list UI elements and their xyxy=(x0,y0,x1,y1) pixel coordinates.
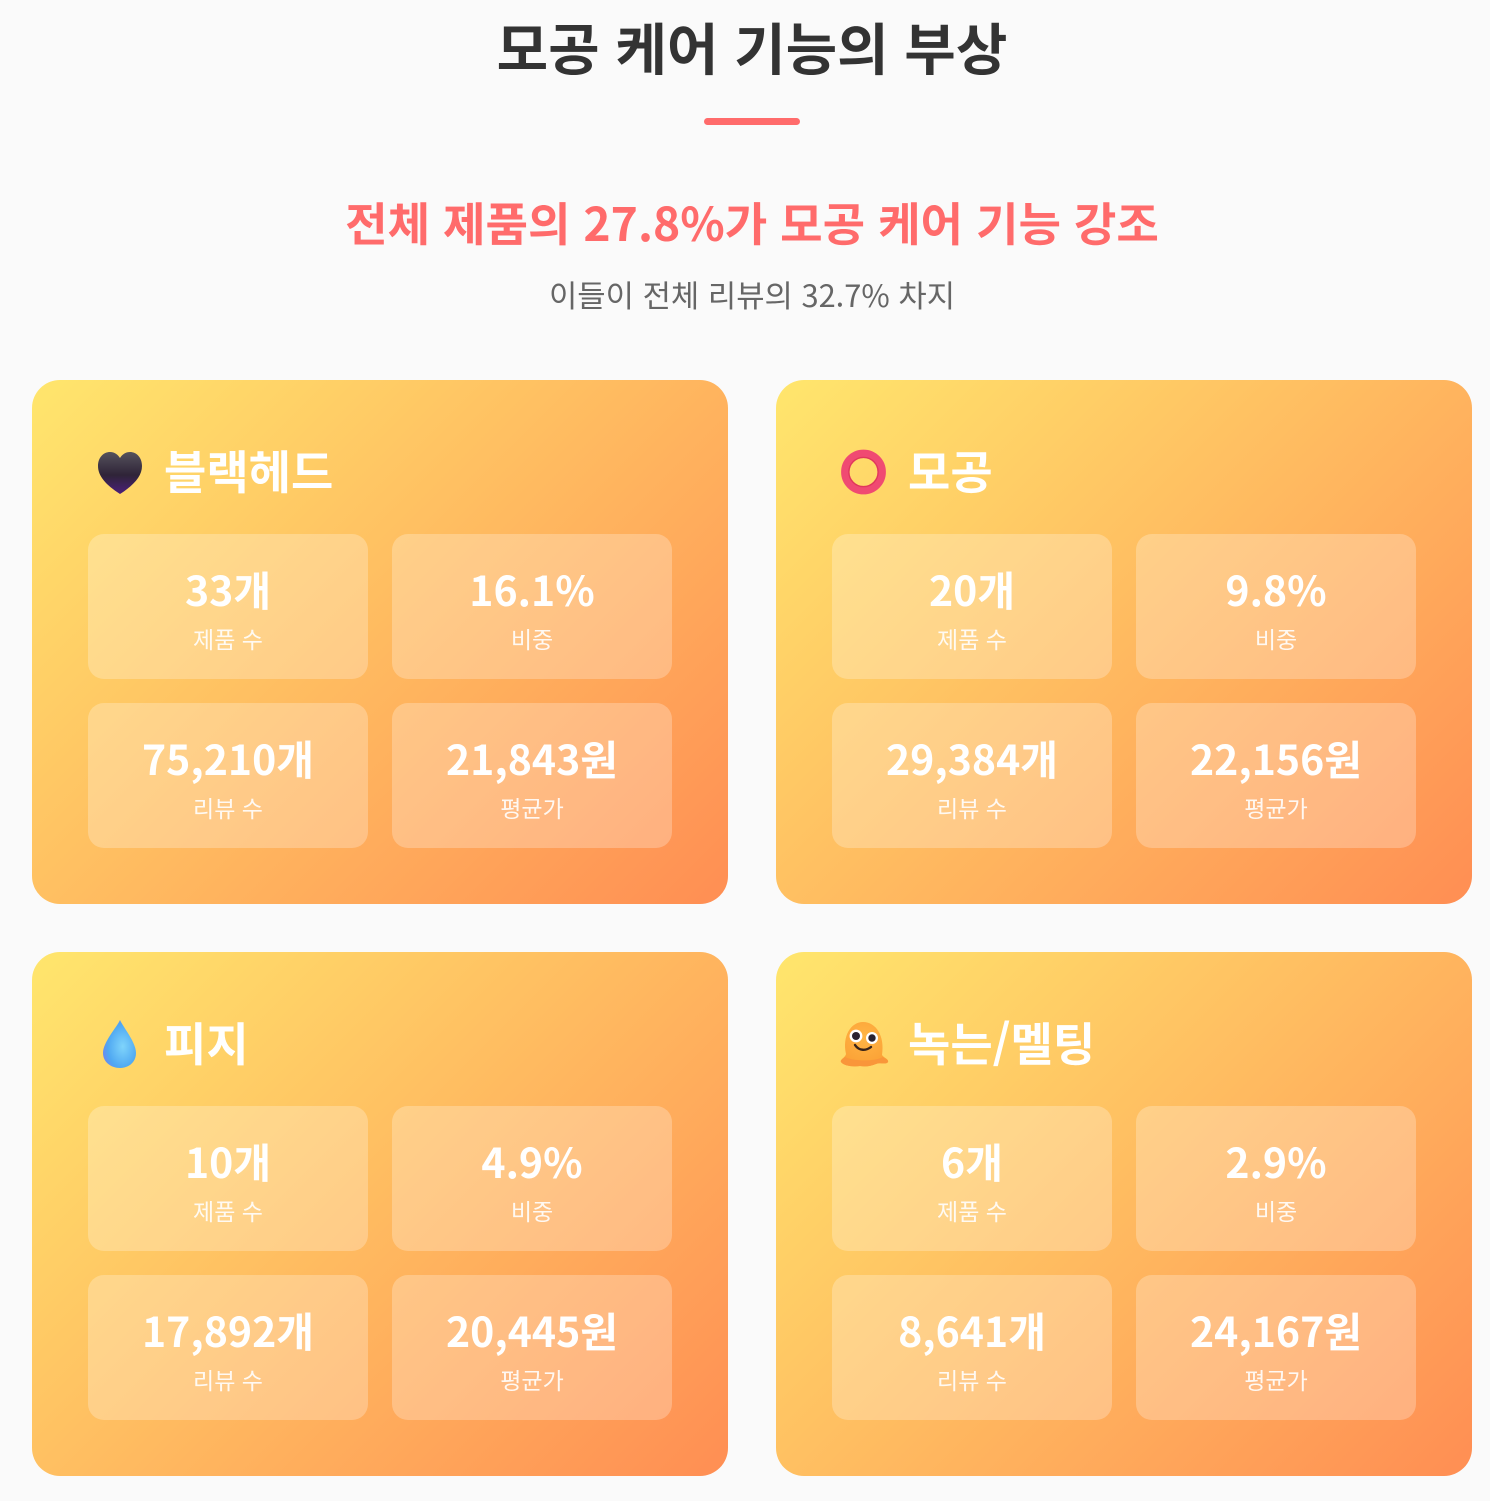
title underline xyxy=(704,118,800,125)
stat: share xyxy=(1136,534,1416,679)
stat: products xyxy=(88,534,368,679)
stat: share: 비중 xyxy=(511,621,553,655)
title: 모공 케어 기능의 부상 xyxy=(497,6,1007,87)
stat: products: 33개 xyxy=(185,558,271,618)
stat: average price: 평균가 xyxy=(1244,1362,1308,1396)
stat: share: 비중 xyxy=(511,1193,553,1227)
stat: products xyxy=(832,534,1112,679)
stat: reviews: 17,892개 xyxy=(142,1299,314,1359)
stat: share xyxy=(392,1106,672,1251)
headline: 전체 제품의 27.8%가 모공 케어 기능 강조 xyxy=(345,188,1159,255)
stat: reviews: 8,641개 xyxy=(898,1299,1046,1359)
stat: reviews xyxy=(88,1275,368,1420)
stat: products xyxy=(88,1106,368,1251)
panel: sebum xyxy=(32,952,728,1476)
stat: share: 비중 xyxy=(1255,1193,1297,1227)
stat: share: 4.9% xyxy=(481,1130,583,1190)
stat: products xyxy=(832,1106,1112,1251)
stat: products: 10개 xyxy=(185,1130,271,1190)
stat: products: 제품 수 xyxy=(193,1193,263,1227)
stat: share: 2.9% xyxy=(1225,1130,1327,1190)
stat: products: 제품 수 xyxy=(937,621,1007,655)
icon: red ring xyxy=(841,450,886,494)
stat: average price: 평균가 xyxy=(500,1362,564,1396)
panel: pores xyxy=(776,380,1472,904)
stat: products: 제품 수 xyxy=(193,621,263,655)
stat: reviews: 29,384개 xyxy=(886,727,1058,787)
stat: reviews xyxy=(88,703,368,848)
stat: products: 6개 xyxy=(941,1130,1003,1190)
stat: products: 20개 xyxy=(929,558,1015,618)
stat: reviews: 75,210개 xyxy=(142,727,314,787)
stat: share xyxy=(392,534,672,679)
stat: average price xyxy=(1136,1275,1416,1420)
icon: water drop xyxy=(103,1020,136,1068)
stat: share: 16.1% xyxy=(469,558,595,618)
stat: share: 비중 xyxy=(1255,621,1297,655)
subheading: 이들이 전체 리뷰의 32.7% 차지 xyxy=(549,271,955,316)
stat: average price: 21,843원 xyxy=(446,727,618,787)
heading: 피지 xyxy=(164,1009,249,1075)
stat: share: 9.8% xyxy=(1225,558,1327,618)
stat: products: 제품 수 xyxy=(937,1193,1007,1227)
heading: 모공 xyxy=(908,437,993,503)
stat: share xyxy=(1136,1106,1416,1251)
stat: reviews: 리뷰 수 xyxy=(193,790,263,824)
stat: average price: 평균가 xyxy=(500,790,564,824)
stat: reviews xyxy=(832,1275,1112,1420)
heading: 블랙헤드 xyxy=(164,437,333,503)
stat: reviews xyxy=(832,703,1112,848)
stat: reviews: 리뷰 수 xyxy=(937,790,1007,824)
stat: average price xyxy=(1136,703,1416,848)
stat: average price xyxy=(392,1275,672,1420)
icon: black heart xyxy=(98,452,142,494)
icon: melting face xyxy=(840,1022,888,1066)
stat: reviews: 리뷰 수 xyxy=(193,1362,263,1396)
panel: melting xyxy=(776,952,1472,1476)
heading: 녹는/멜팅 xyxy=(908,1009,1095,1075)
stat: average price: 22,156원 xyxy=(1190,727,1362,787)
stat: average price: 24,167원 xyxy=(1190,1299,1362,1359)
panel: blackhead xyxy=(32,380,728,904)
stat: average price: 평균가 xyxy=(1244,790,1308,824)
stat: average price xyxy=(392,703,672,848)
stat: average price: 20,445원 xyxy=(446,1299,618,1359)
stat: reviews: 리뷰 수 xyxy=(937,1362,1007,1396)
